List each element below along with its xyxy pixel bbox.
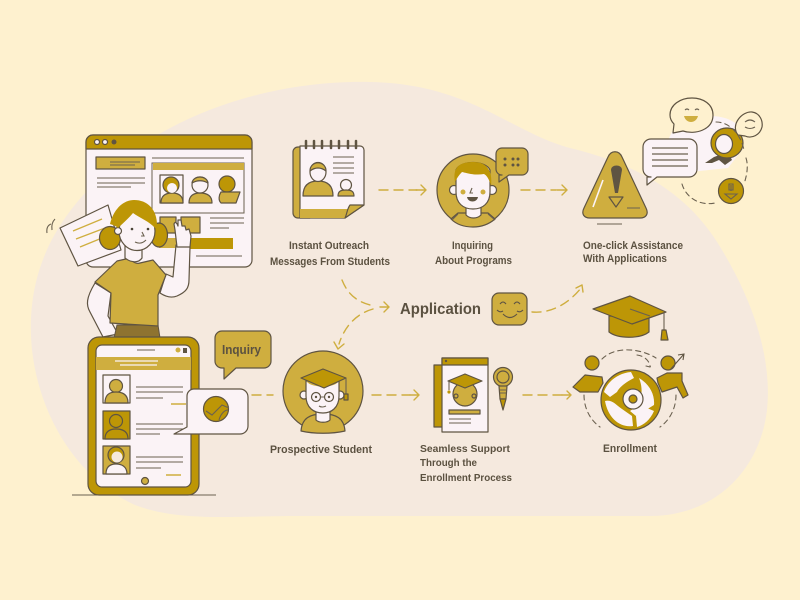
text: Instant Outreach label: Instant Outreach — [289, 240, 369, 252]
text: Instant Outreach label — [270, 240, 390, 268]
text: Inquiring label: About Programs — [435, 255, 512, 267]
icon: alert triangle — [583, 152, 647, 224]
icon: chat bubble with dots — [496, 148, 528, 182]
icon: pen with seal — [494, 368, 512, 410]
panel: website window — [86, 135, 252, 267]
icon: inquiring student portrait — [437, 154, 509, 227]
arrow: curved path to Application — [342, 280, 389, 312]
text: Seamless Support label: Seamless Support — [420, 443, 510, 455]
text: Enrollment label: Enrollment — [603, 443, 657, 455]
text: One-click Assistance label: With Applications — [583, 253, 667, 265]
text: Inquiring label: Inquiring — [452, 240, 493, 252]
illustration: girl waving with paper — [47, 200, 191, 338]
heading: Application: Application — [400, 301, 481, 318]
arrow: support to enrollment — [523, 391, 571, 399]
arrow: student to support — [372, 390, 419, 400]
arrow: phone to prospective student — [252, 394, 273, 396]
arrow: application to assistance — [532, 285, 583, 312]
arrow: notebook to inquiring — [379, 185, 426, 195]
icon cluster: chat and support — [643, 98, 762, 204]
text: One-click Assistance label — [583, 240, 683, 265]
icon: checkmark chat bubble — [174, 389, 248, 434]
icon: notebook profile — [293, 141, 364, 218]
callout: Inquiry bubble: Inquiry — [222, 343, 261, 357]
icon: prospective student portrait — [283, 351, 363, 433]
text: Seamless Support label — [420, 443, 512, 484]
icon: graduation cap — [593, 296, 668, 340]
arrow: application to prospective student — [334, 309, 373, 349]
icon: globe with gear and people — [573, 350, 688, 430]
icon: smiley tile — [492, 293, 527, 325]
text: Prospective Student label: Prospective Student — [270, 444, 372, 456]
background blob — [31, 82, 768, 517]
text: Instant Outreach label: Messages From Students — [270, 256, 390, 268]
text: One-click Assistance label: One-click Assistance — [583, 240, 683, 252]
arrow: inquiring to assistance — [521, 185, 567, 195]
text: Seamless Support label: Through the — [420, 457, 477, 469]
icon: certificate document — [434, 358, 488, 432]
text: Inquiring label — [435, 240, 512, 267]
text: Seamless Support label: Enrollment Process — [420, 472, 512, 484]
panel: phone with student list — [72, 337, 216, 495]
callout: Inquiry bubble — [215, 331, 271, 379]
